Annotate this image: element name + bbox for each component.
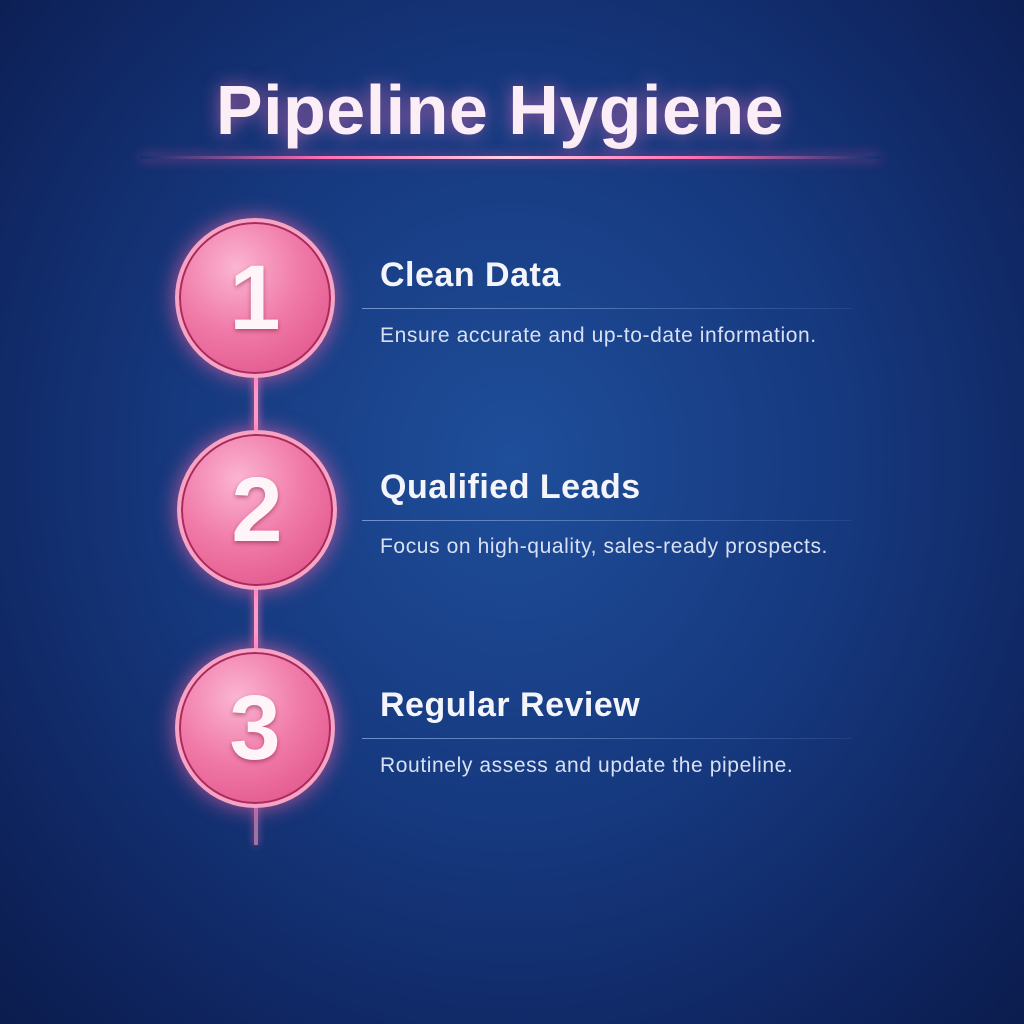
step 1 description: Ensure accurate and up-to-date information.: [380, 324, 817, 347]
title glow underline: [140, 156, 880, 159]
circle 3: 3: [229, 677, 281, 779]
step 2 heading: Qualified Leads: [380, 468, 641, 506]
circle 2: [177, 430, 337, 590]
title: Pipeline Hygiene: [216, 71, 784, 149]
circle 2: 2: [231, 459, 283, 561]
connector 2-3: [254, 588, 258, 648]
step 3 description: Routinely assess and update the pipeline.: [380, 754, 793, 777]
connector below 3: [254, 805, 258, 845]
step 3 heading: Regular Review: [380, 686, 640, 724]
circle 1: 1: [229, 247, 281, 349]
step 1 heading: Clean Data: [380, 256, 561, 294]
step 2 description: Focus on high-quality, sales-ready prospects.: [380, 535, 828, 558]
connector 1-2: [254, 375, 258, 430]
circle 1: [175, 218, 335, 378]
circle 3: [175, 648, 335, 808]
